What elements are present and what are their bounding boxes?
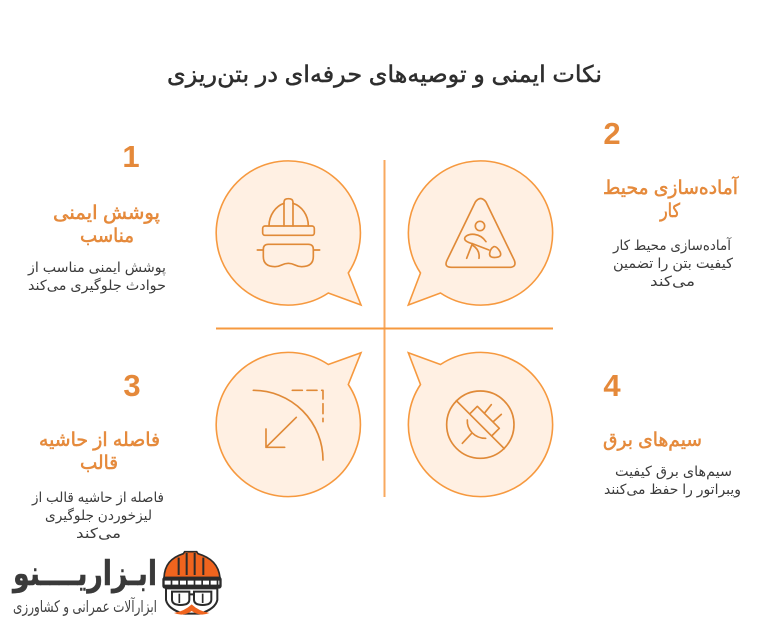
- title: نکات ایمنی و توصیه‌های حرفه‌ای در بتن‌ریزی: [167, 61, 602, 88]
- body 2: [612, 237, 733, 289]
- body 1: پوشش ایمنی مناسب از: [27, 259, 166, 276]
- text block 1: [27, 139, 166, 294]
- panel: bubble 4 no plug: [408, 352, 553, 497]
- body 3: فاصله از حاشیه قالب از: [31, 489, 164, 506]
- logo tagline: ابزارآلات عمرانی و کشاورزی: [13, 597, 157, 617]
- logo: [11, 552, 221, 617]
- number 2: 2: [603, 116, 621, 151]
- icon: helmet and goggles: [257, 199, 320, 267]
- icon: logo worker helmet: [163, 552, 221, 615]
- body 4: سیم‌های برق کیفیت: [615, 463, 732, 480]
- body 2: کیفیت بتن را تضمین: [613, 255, 733, 272]
- body 3: می‌کند: [76, 525, 121, 541]
- heading 3: فاصله از حاشیه: [39, 430, 160, 451]
- heading 1: مناسب: [80, 226, 134, 247]
- body 3: [31, 489, 164, 541]
- body 4: [604, 463, 741, 498]
- heading 4: سیم‌های برق: [603, 430, 702, 451]
- panel: bubble 2 work sign: [408, 161, 553, 305]
- text block 3: [31, 368, 164, 541]
- body 2: آماده‌سازی محیط کار: [612, 237, 732, 254]
- panel: bubble 1 helmet and goggles: [216, 161, 361, 305]
- heading 3: قالب: [80, 453, 118, 474]
- heading 2: [603, 175, 739, 222]
- body 1: حوادث جلوگیری می‌کند: [28, 277, 166, 294]
- body 3: لیزخوردن جلوگیری: [45, 507, 152, 524]
- heading 3: [39, 430, 160, 474]
- logo wordmark: ابـزاریــــنو: [11, 555, 157, 594]
- panel: bubble 3 formwork margin: [216, 352, 361, 497]
- icon: corner margin arrow: [253, 390, 323, 460]
- central cross divider: [216, 160, 553, 497]
- icon: crossed out plug: [447, 391, 514, 458]
- heading 2: کار: [659, 201, 681, 222]
- number 4: 4: [603, 368, 621, 403]
- heading 1: [53, 203, 160, 247]
- text block 2: [603, 116, 739, 289]
- text block 4: [603, 368, 741, 498]
- icon: worker warning sign: [446, 198, 515, 267]
- heading 2: آماده‌سازی محیط: [603, 175, 739, 199]
- number 3: 3: [123, 368, 141, 403]
- number 1: 1: [122, 139, 140, 174]
- heading 1: پوشش ایمنی: [53, 203, 160, 224]
- body 2: می‌کند: [650, 273, 695, 289]
- body 1: [27, 259, 166, 294]
- body 4: ویبراتور را حفظ می‌کنند: [604, 481, 741, 498]
